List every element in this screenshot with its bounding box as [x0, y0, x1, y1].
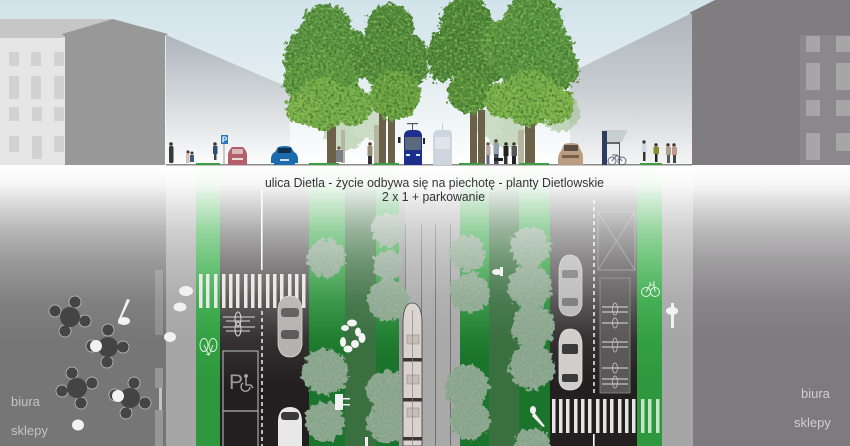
ghost tram — [433, 123, 452, 165]
left cycle parking marks — [223, 312, 255, 336]
bicycle marking right path — [642, 281, 660, 296]
left road centre line — [261, 190, 263, 446]
blue car — [271, 146, 298, 165]
tram shelter — [601, 130, 628, 165]
tree 3 crown — [427, 0, 510, 114]
plan: left cycle path — [196, 166, 220, 446]
left road car 2 — [278, 407, 302, 446]
plan: tram corridor — [399, 166, 460, 446]
right cycle parking box — [600, 278, 630, 393]
section title: ulica Dietla - życie odbywa się na piechotę - planty Dietlowskie — [265, 175, 604, 190]
plan: left roadway — [220, 166, 309, 446]
right building silhouette — [689, 0, 850, 165]
left frontage labels — [11, 394, 48, 438]
sky — [0, 0, 850, 166]
section title: 2 x 1 + parkowanie — [382, 189, 485, 204]
tree 1 crown — [283, 4, 382, 130]
cafe tables — [49, 296, 151, 419]
right road car 1 — [559, 255, 582, 316]
plan: left green belt — [309, 166, 399, 446]
section title — [265, 175, 604, 204]
right crosswalk — [552, 399, 660, 433]
pedestrians right group — [486, 139, 517, 164]
right road car 2 — [559, 329, 582, 390]
bicycle marking left path — [200, 338, 217, 355]
plan: right green belt — [460, 166, 550, 446]
plan trees right — [445, 227, 555, 446]
pedestrian and cyclist by the trees — [336, 142, 372, 164]
road surface fade right — [550, 166, 637, 385]
left frontage labels: sklepy — [11, 423, 48, 438]
parking sign: P — [222, 136, 228, 144]
green verges in section — [196, 163, 662, 165]
parking sign — [221, 135, 228, 165]
faint background trunks — [341, 125, 524, 163]
crossed-out zone — [598, 212, 635, 270]
plan: right sidewalk — [693, 166, 850, 446]
road surface fade left — [220, 166, 309, 385]
pedestrians left — [169, 142, 194, 163]
white fade over the plan — [0, 166, 850, 342]
left frontage labels: biura — [11, 394, 41, 409]
beige car — [558, 143, 583, 165]
cyclist left — [213, 142, 218, 160]
parked bicycle — [608, 155, 626, 165]
tree 2 crown — [350, 4, 429, 120]
background faint trees — [323, 92, 580, 150]
ground line — [166, 164, 692, 166]
plan: left sidewalk — [0, 166, 166, 446]
tram top view — [403, 303, 422, 446]
white pedestrians on plan — [72, 267, 678, 446]
cyclists and pedestrians right — [642, 140, 677, 163]
red car — [228, 147, 247, 165]
right frontage labels — [794, 386, 831, 430]
disabled parking bays — [223, 351, 258, 446]
left crosswalk — [199, 274, 306, 308]
tree 4 crown — [480, 0, 580, 126]
plan: right pavement strip — [662, 166, 693, 446]
disabled parking bays: P — [229, 371, 243, 394]
left background building — [0, 19, 113, 165]
left building silhouette — [62, 19, 168, 165]
right building shadow wedge — [570, 13, 692, 165]
plan: right roadway — [550, 166, 637, 446]
right frontage labels: biura — [801, 386, 831, 401]
tree trunks — [327, 110, 535, 164]
right road centre line — [593, 200, 595, 446]
front tram — [398, 123, 425, 165]
left road car 1 — [278, 296, 302, 357]
right frontage labels: sklepy — [794, 415, 831, 430]
left building shadow wedge — [166, 35, 290, 165]
plan trees left — [302, 213, 409, 443]
plan: left pavement strip — [166, 166, 196, 446]
plan: right cycle path — [637, 166, 662, 446]
white ring of figures on plan — [340, 320, 366, 352]
